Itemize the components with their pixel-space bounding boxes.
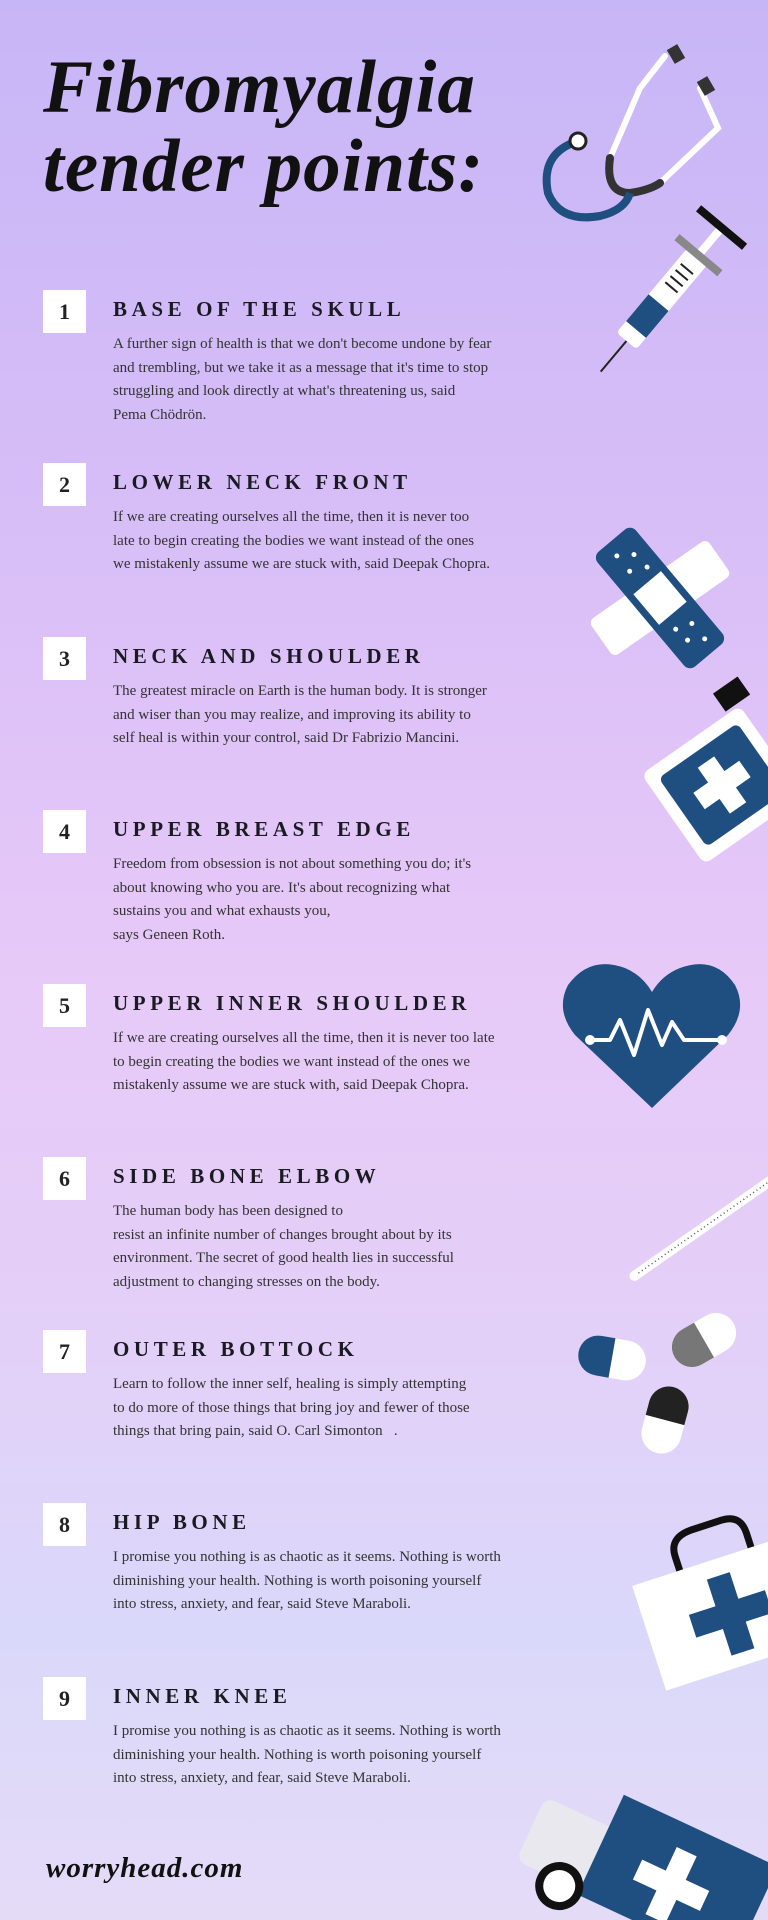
section 3: NECK AND SHOULDER <box>113 644 425 668</box>
icon: pills <box>575 1306 743 1458</box>
section 2: LOWER NECK FRONT <box>113 470 412 494</box>
section 3: The greatest miracle on Earth is the human body. It is stronger <box>113 683 487 699</box>
section 6: The human body has been designed to <box>113 1203 343 1219</box>
section 9: into stress, anxiety, and fear, said Steve Maraboli. <box>113 1770 411 1786</box>
section 6: environment. The secret of good health lies in successful <box>113 1250 454 1266</box>
section 5: to begin creating the bodies we want instead of the ones we <box>113 1054 470 1070</box>
section 2: we mistakenly assume we are stuck with, said Deepak Chopra. <box>113 556 490 572</box>
section 1: struggling and look directly at what's threatening us, said <box>113 383 455 399</box>
section 5 <box>43 984 495 1093</box>
section 2: 2 <box>59 472 70 497</box>
footer website: worryhead.com <box>46 1852 243 1884</box>
section 7: 7 <box>59 1339 70 1364</box>
title: tender points: <box>43 125 484 208</box>
section 4 <box>43 810 471 942</box>
section 1: Pema Chödrön. <box>113 406 206 422</box>
section 8: 8 <box>59 1512 70 1537</box>
icon: bandage <box>588 524 732 672</box>
section 5: mistakenly assume we are stuck with, said Deepak Chopra. <box>113 1077 469 1093</box>
section 7: things that bring pain, said O. Carl Simonton . <box>113 1423 398 1439</box>
section 8: I promise you nothing is as chaotic as it seems. Nothing is worth <box>113 1549 501 1565</box>
section 9: 9 <box>59 1686 70 1711</box>
section 9: INNER KNEE <box>113 1684 291 1708</box>
section 3: 3 <box>59 646 70 671</box>
section 6: resist an infinite number of changes brought about by its <box>113 1226 452 1242</box>
section 3: self heal is within your control, said Dr Fabrizio Mancini. <box>113 730 459 746</box>
section 7: to do more of those things that bring joy and fewer of those <box>113 1400 470 1416</box>
icon: medical kit <box>621 1494 768 1691</box>
section 6: 6 <box>59 1166 70 1191</box>
section 6: SIDE BONE ELBOW <box>113 1164 380 1188</box>
section 1: A further sign of health is that we don't become undone by fear <box>113 336 491 352</box>
section 1: BASE OF THE SKULL <box>113 297 405 321</box>
section 7: OUTER BOTTOCK <box>113 1337 359 1361</box>
section 6: adjustment to changing stresses on the body. <box>113 1274 380 1290</box>
icon: ambulance <box>503 1765 768 1920</box>
section 4: sustains you and what exhausts you, <box>113 903 330 919</box>
section 2: late to begin creating the bodies we want instead of the ones <box>113 532 474 548</box>
section 2 <box>43 463 490 572</box>
section 4: says Geneen Roth. <box>113 926 225 942</box>
section 8: HIP BONE <box>113 1510 251 1534</box>
title <box>42 46 484 208</box>
icon: medicine bottle <box>627 676 768 864</box>
icon: heart with pulse <box>563 964 740 1108</box>
section 3 <box>43 637 487 746</box>
section 7 <box>43 1330 470 1439</box>
section 6 <box>43 1157 454 1290</box>
icon: thermometer <box>628 1174 768 1283</box>
section 1: 1 <box>59 299 70 324</box>
section 8: into stress, anxiety, and fear, said Steve Maraboli. <box>113 1596 411 1612</box>
section 8 <box>43 1503 501 1612</box>
icon: syringe <box>578 205 747 391</box>
icon: stethoscope <box>547 44 718 217</box>
section 4: Freedom from obsession is not about something you do; it's <box>113 856 471 872</box>
section 1: and trembling, but we take it as a message that it's time to stop <box>113 360 488 376</box>
title: Fibromyalgia <box>43 46 476 129</box>
section 7: Learn to follow the inner self, healing is simply attempting <box>113 1376 466 1392</box>
section 9 <box>43 1677 501 1786</box>
section 9: I promise you nothing is as chaotic as it seems. Nothing is worth <box>113 1723 501 1739</box>
section 5: UPPER INNER SHOULDER <box>113 991 471 1015</box>
section 2: If we are creating ourselves all the time, then it is never too <box>113 509 469 525</box>
section 5: If we are creating ourselves all the time, then it is never too late <box>113 1030 495 1046</box>
section 9: diminishing your health. Nothing is worth poisoning yourself <box>113 1746 481 1762</box>
section 8: diminishing your health. Nothing is worth poisoning yourself <box>113 1572 481 1588</box>
section 4: 4 <box>59 819 70 844</box>
section 5: 5 <box>59 993 70 1018</box>
section 4: UPPER BREAST EDGE <box>113 817 415 841</box>
section 3: and wiser than you may realize, and improving its ability to <box>113 706 471 722</box>
section 4: about knowing who you are. It's about recognizing what <box>113 880 450 896</box>
section 1 <box>43 290 492 422</box>
